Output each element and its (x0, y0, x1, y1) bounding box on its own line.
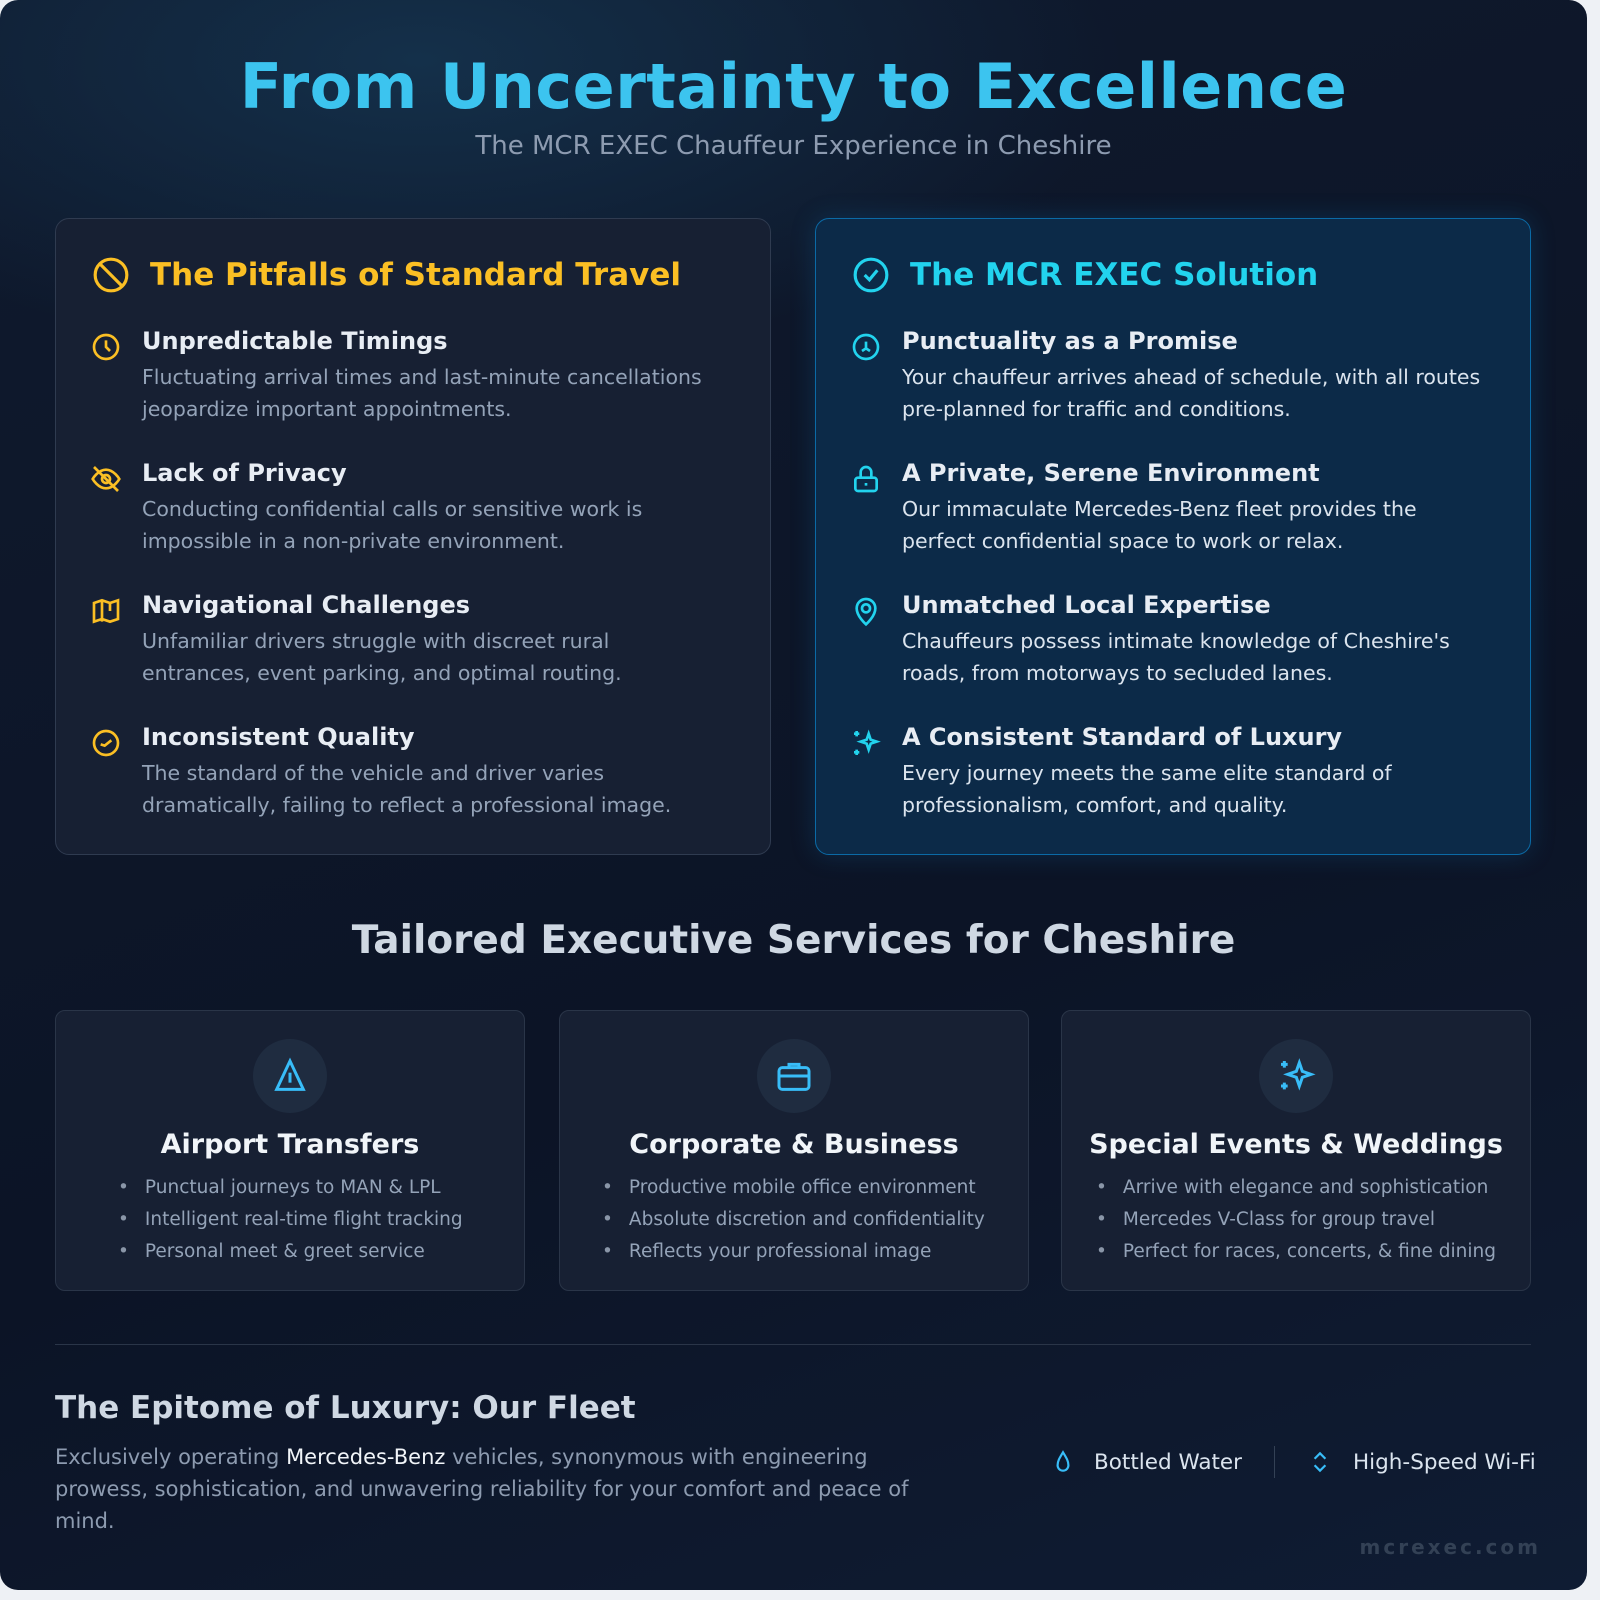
amenities: High-Speed Wi-Fi (1353, 1450, 1536, 1474)
service: events: Arrive with elegance and sophistication (1123, 1177, 1488, 1198)
service: airport: Airport Transfers (161, 1129, 419, 1160)
panel: pitfalls: Unfamiliar drivers struggle with discreet rural entrances, event parking, and optimal routing. (142, 629, 622, 685)
amenities (1056, 1446, 1536, 1478)
icon: briefcase (757, 1039, 831, 1113)
icon: plane (253, 1039, 327, 1113)
panel: solution: Chauffeurs possess intimate knowledge of Cheshire's roads, from motorways to secluded lanes. (902, 629, 1450, 685)
panel: solution: A Private, Serene Environment (902, 459, 1320, 487)
panel: pitfalls: Lack of Privacy (142, 459, 347, 487)
service: corporate (559, 1010, 1029, 1291)
subtitle: The MCR EXEC Chauffeur Experience in Cheshire (475, 131, 1112, 161)
panel: solution: Our immaculate Mercedes-Benz fleet provides the perfect confidential space to work or relax. (902, 497, 1417, 553)
service: events: Special Events & Weddings (1089, 1129, 1503, 1160)
item: private (854, 459, 1417, 553)
service: events: Perfect for races, concerts, & fine dining (1123, 1241, 1496, 1262)
panel: pitfalls: Inconsistent Quality (142, 723, 415, 751)
panel: solution (815, 218, 1531, 855)
service: corporate: Productive mobile office environment (629, 1177, 976, 1198)
panel: solution: Your chauffeur arrives ahead of schedule, with all routes pre-planned for traffic and conditions. (902, 365, 1480, 421)
panel: solution: Punctuality as a Promise (902, 327, 1238, 355)
service: airport: Intelligent real-time flight tracking (145, 1209, 463, 1230)
footer url: mcrexec.com (1360, 1535, 1541, 1559)
icon: sparkles (1259, 1039, 1333, 1113)
solution heading: The MCR EXEC Solution (910, 257, 1318, 293)
item: punctuality (852, 327, 1480, 421)
panel: pitfalls: Unpredictable Timings (142, 327, 448, 355)
panel: solution: Unmatched Local Expertise (902, 591, 1271, 619)
fleet heading: The Epitome of Luxury: Our Fleet (55, 1390, 636, 1426)
panel: pitfalls: Navigational Challenges (142, 591, 470, 619)
panel: pitfalls (55, 218, 771, 855)
service: events (1061, 1010, 1531, 1291)
pitfalls heading: The Pitfalls of Standard Travel (150, 257, 681, 293)
panel: pitfalls: Fluctuating arrival times and last-minute cancellations jeopardize important appointments. (142, 365, 702, 421)
item: timings (92, 327, 702, 421)
amenities: Bottled Water (1094, 1450, 1242, 1474)
service: corporate: Absolute discretion and confidentiality (629, 1209, 985, 1230)
title: From Uncertainty to Excellence (240, 50, 1347, 123)
panel: pitfalls: Conducting confidential calls or sensitive work is impossible in a non-private environment. (142, 497, 642, 553)
panel: pitfalls: The standard of the vehicle and driver varies dramatically, failing to reflect a professional image. (142, 761, 671, 817)
service: airport (55, 1010, 525, 1291)
panel: solution: A Consistent Standard of Luxury (902, 723, 1342, 751)
fleet text: Exclusively operating Mercedes-Benz vehicles, synonymous with engineering prowess, sophistication, and unwavering reliability for your comfort and peace of mind. (55, 1445, 908, 1533)
service: corporate: Corporate & Business (629, 1129, 959, 1160)
item: privacy (91, 459, 642, 553)
services heading: Tailored Executive Services for Cheshire (352, 918, 1235, 963)
panel: solution: Every journey meets the same elite standard of professionalism, comfort, and quality. (902, 761, 1392, 817)
item: local (855, 591, 1450, 685)
service: events: Mercedes V-Class for group travel (1123, 1209, 1435, 1230)
item: navigation (92, 591, 622, 685)
item: luxury (854, 723, 1392, 817)
service: corporate: Reflects your professional image (629, 1241, 931, 1262)
service: airport: Punctual journeys to MAN & LPL (145, 1177, 441, 1198)
item: quality (92, 723, 671, 817)
service: airport: Personal meet & greet service (145, 1241, 425, 1262)
